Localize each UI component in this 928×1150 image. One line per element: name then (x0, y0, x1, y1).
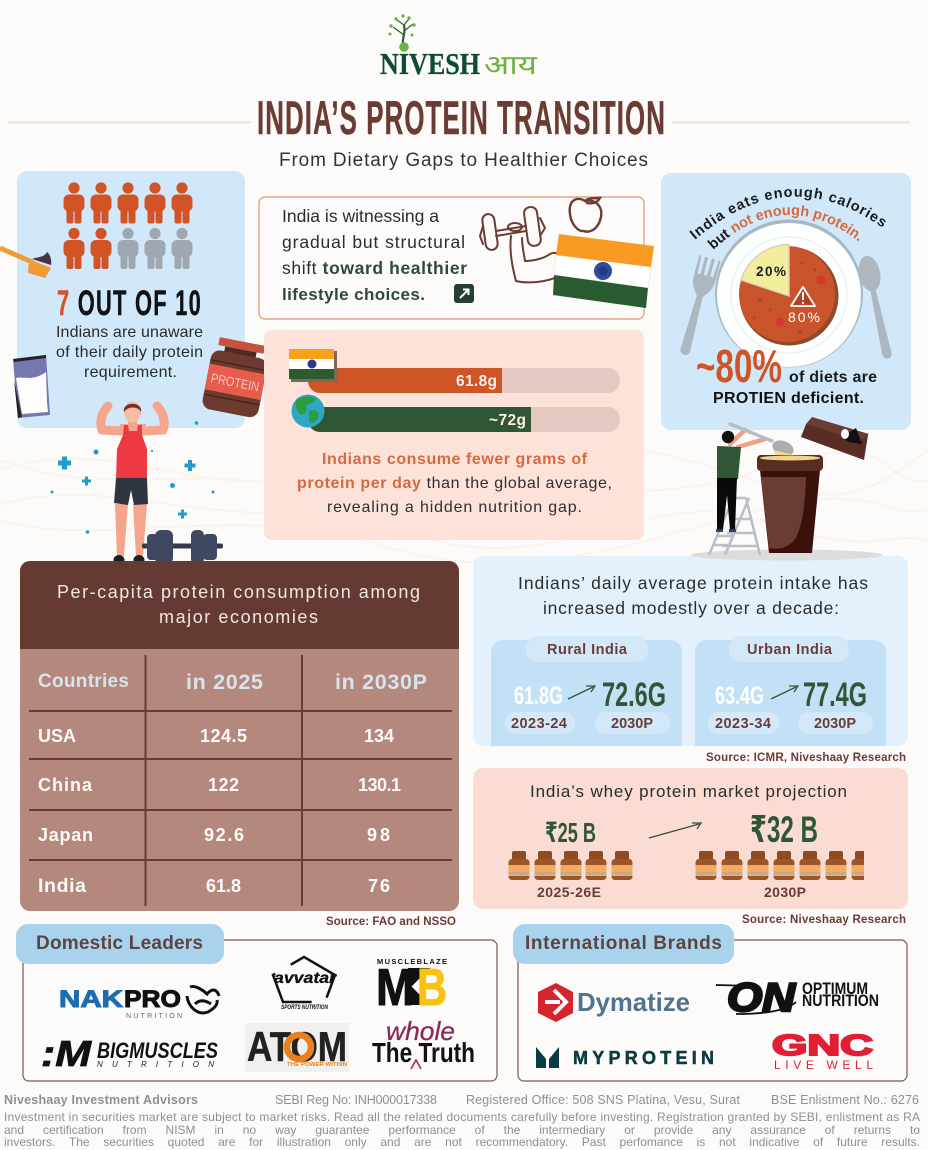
card: urban India: Urban India (747, 642, 833, 658)
logo: MuscleBlaze: M (376, 959, 414, 1017)
panel: 7 out of 10 awareness (17, 171, 245, 428)
logo: Nakpro: NAK (59, 986, 124, 1013)
text: shift statement: shift toward healthier (282, 258, 467, 278)
table header row: Countries (38, 671, 129, 692)
text: consumption comparison: revealing a hidden nutrition gap. (327, 499, 582, 516)
card: urban India (695, 636, 886, 746)
logo: BigMuscles: BIGMUSCLES (97, 1038, 218, 1063)
logo: Nakpro (59, 986, 219, 1020)
logo: MyProtein: MYPROTEIN (573, 1048, 714, 1068)
stat: 7 out of 10: 7 OUT OF 10 (57, 284, 202, 323)
logo: GNC: GNC (772, 1030, 873, 1062)
arrow (649, 823, 701, 838)
logo: Avvatar: avvatar (274, 970, 337, 987)
icon: fork (673, 255, 721, 358)
logo: BigMuscles (41, 1033, 218, 1074)
icon: barbell (142, 530, 223, 564)
decoration: sparkles (50, 421, 214, 534)
icon: shaker lid (801, 417, 869, 460)
icon: shaker cup (757, 455, 823, 553)
footer: registration line: Niveshaay Investment Advisors (4, 1093, 198, 1107)
table rows: Japan (38, 825, 93, 845)
text: consumption comparison (297, 451, 612, 516)
table: per-capita protein (20, 561, 459, 911)
bar chart: India vs global protein: 61.8g (456, 373, 497, 390)
table rows: 122 (208, 775, 239, 795)
panel: domestic leaders: Domestic Leaders (36, 933, 203, 954)
logo: The Whole Truth (372, 1016, 475, 1069)
card: rural India: 61.8G (514, 682, 563, 710)
icon: Indian flag tilted (553, 234, 654, 308)
panel: whey protein market: 2030P (764, 884, 806, 900)
table title: Per-capita protein consumption among (57, 582, 420, 602)
curved heading: India eats enough calories (689, 188, 886, 240)
logo: MuscleBlaze: B (417, 959, 447, 1017)
panel: whey protein market: 2025-26E (537, 884, 601, 900)
text: unaware (56, 324, 203, 381)
text: intake heading: Indians’ daily average protein intake has (518, 573, 868, 593)
text: unaware: of their daily protein (56, 344, 203, 361)
footer: registration line: BSE Enlistment No.: 6276 (771, 1093, 919, 1107)
icon: jars 2025-26E (508, 851, 632, 880)
panel: international brands (513, 924, 907, 1081)
footer: disclaimer first line: Investment in securities market are subject to market risks. Read all the related documents carefully before investing. Registration granted by SEBI, enlistment as RA (4, 1110, 920, 1124)
logo: Atom: THE POWER WITHIN (287, 1062, 347, 1068)
stat: 80 percent of diets: PROTIEN deficient. (713, 390, 864, 407)
icon: India flag (289, 349, 337, 382)
logo: Optimum Nutrition: ON (727, 976, 796, 1020)
panel: structural shift (259, 197, 654, 319)
table title: major economies (159, 607, 318, 627)
footer: registration line (4, 1093, 919, 1107)
icon: plate with pie (715, 220, 863, 368)
logo: Dymatize (538, 983, 690, 1022)
label: 20 percent: 20% (756, 264, 786, 279)
bar chart: India vs global protein (308, 368, 620, 432)
card: rural India: Rural India (547, 642, 628, 658)
source: Niveshaay: Source: Niveshaay Research (742, 914, 906, 926)
footer: disclaimer second line: and certification from NISM in no way guarantee performance of the intermediary or provide any assurance of returns to (4, 1123, 920, 1137)
logo: MuscleBlaze (376, 957, 447, 1017)
text: shift statement: gradual but structural (282, 232, 465, 252)
text: intake heading (518, 573, 868, 618)
card: rural India (491, 636, 682, 746)
panel: whey protein market: India’s whey protein market projection (530, 782, 847, 801)
table rows: USA (38, 726, 76, 746)
panel: international brands: International Brands (525, 933, 722, 954)
bar chart: India vs global protein: ~72g (489, 412, 526, 429)
logo: Dymatize: Dymatize (577, 987, 690, 1017)
logo: The Whole Truth: whole (386, 1016, 455, 1046)
icon: people grid 7 of 10 (64, 182, 192, 269)
source: FAO: Source: FAO and NSSO (326, 916, 456, 928)
icon: flexing man (101, 402, 164, 565)
table rows: 98 (367, 825, 390, 845)
footer: disclaimer third line: investors. The securities quoted are for illustration only and are not recommendatory. Past perfomance is not indicative of future results. (4, 1135, 920, 1149)
panel: protein intake trend (473, 556, 908, 746)
panel: not enough protein (661, 173, 911, 430)
icon: ground shadow (691, 550, 883, 560)
table rows: 92.6 (204, 825, 244, 845)
icon: muscle arm with dumbbell (480, 206, 559, 282)
icon: ladder (709, 498, 760, 555)
logo (380, 14, 539, 81)
text: shift statement: lifestyle choices. (282, 285, 425, 304)
icon: arrow button (454, 284, 474, 303)
text: unaware: requirement. (84, 364, 177, 381)
card: rural India: 2023-24 (511, 716, 567, 732)
card: urban India: 2023-34 (715, 716, 771, 732)
card: urban India: 63.4G (715, 682, 764, 710)
label: 80 percent: 80% (788, 309, 820, 325)
footer: registration line: SEBI Reg No: INH000017338 (275, 1093, 437, 1107)
curved heading: but not enough protein. (707, 205, 860, 250)
logo: Avvatar: SPORTS NUTRITION (281, 1005, 329, 1011)
source: ICMR: Source: ICMR, Niveshaay Research (706, 752, 906, 764)
card: rural India: 2030P (611, 716, 653, 732)
table rows: China (38, 775, 93, 795)
icon: jars 2030P (696, 851, 872, 880)
text: unaware: Indians are unaware (56, 324, 203, 341)
logo: Optimum Nutrition (716, 976, 879, 1020)
panel: fewer grams (264, 330, 644, 540)
logo: Avvatar (273, 957, 337, 1011)
logo: Optimum Nutrition: NUTRITION (802, 991, 879, 1010)
icon: milk jar (13, 355, 50, 418)
logo: GNC (772, 1030, 873, 1072)
icon: apple outline (570, 198, 601, 232)
icon: logo tree (388, 14, 416, 52)
logo: MuscleBlaze: MUSCLEBLAZE (377, 957, 447, 966)
stat: 80 percent of diets (696, 340, 877, 407)
stat: 25 B: ₹25 B (545, 817, 596, 848)
text: shift statement (282, 206, 467, 304)
table header row: in 2030P (335, 670, 427, 694)
icon: warning triangle (791, 287, 815, 306)
table rows: 61.8 (206, 876, 241, 896)
icon: globe (292, 394, 324, 428)
logo: Optimum Nutrition: OPTIMUM (802, 979, 868, 998)
subtitle: From Dietary Gaps to Healthier Choices (279, 150, 648, 171)
text: consumption comparison: Indians consume fewer grams of (322, 451, 588, 468)
stat: 80 percent of diets: ~80% (696, 340, 782, 392)
text: consumption comparison: protein per day than the global average, (297, 475, 612, 492)
panel: whey protein market (473, 768, 908, 909)
table rows: 134 (364, 726, 394, 746)
card: urban India: 2030P (814, 716, 856, 732)
logo: BigMuscles: NUTRITION (97, 1060, 214, 1069)
icon: worker (716, 424, 796, 532)
table header row (38, 670, 427, 694)
text: intake heading: increased modestly over a decade: (543, 598, 839, 618)
logo: Nakpro: NUTRITION (126, 1013, 182, 1020)
stat: 80 percent of diets: of diets are (789, 369, 877, 386)
table rows: 124.5 (200, 726, 247, 746)
logo: GNC: LIVE WELL (774, 1058, 873, 1072)
text: shift statement: India is witnessing a (282, 206, 439, 226)
illustration: person filling shaker (691, 417, 883, 560)
table grid (29, 655, 452, 906)
logo: Nakpro: PRO (124, 986, 181, 1013)
table rows: 76 (368, 876, 390, 896)
logo: NIVESH (380, 46, 480, 81)
stat: 32 B: ₹32 B (750, 809, 818, 850)
table rows: 130.1 (358, 775, 401, 795)
logo: The Whole Truth: The Truth (372, 1037, 475, 1068)
background wave pattern (0, 440, 928, 563)
table title (57, 582, 420, 627)
logo: Atom: ATOM (247, 1023, 347, 1070)
logo: आय (484, 50, 539, 80)
logo: BigMuscles: :M (41, 1033, 92, 1074)
footer: registration line: Registered Office: 508 SNS Platina, Vesu, Surat (466, 1093, 741, 1107)
table header row: in 2025 (186, 670, 263, 694)
icon: protein jar (201, 336, 271, 419)
card: urban India: 77.4G (803, 676, 867, 714)
icon: protein jar: PROTEIN (210, 370, 261, 394)
table rows (38, 726, 401, 897)
table rows: India (38, 875, 86, 897)
panel: domestic leaders (16, 924, 497, 1081)
icon: spoon (856, 254, 898, 361)
icon: scoop (0, 248, 51, 278)
card: rural India: 72.6G (602, 676, 666, 714)
